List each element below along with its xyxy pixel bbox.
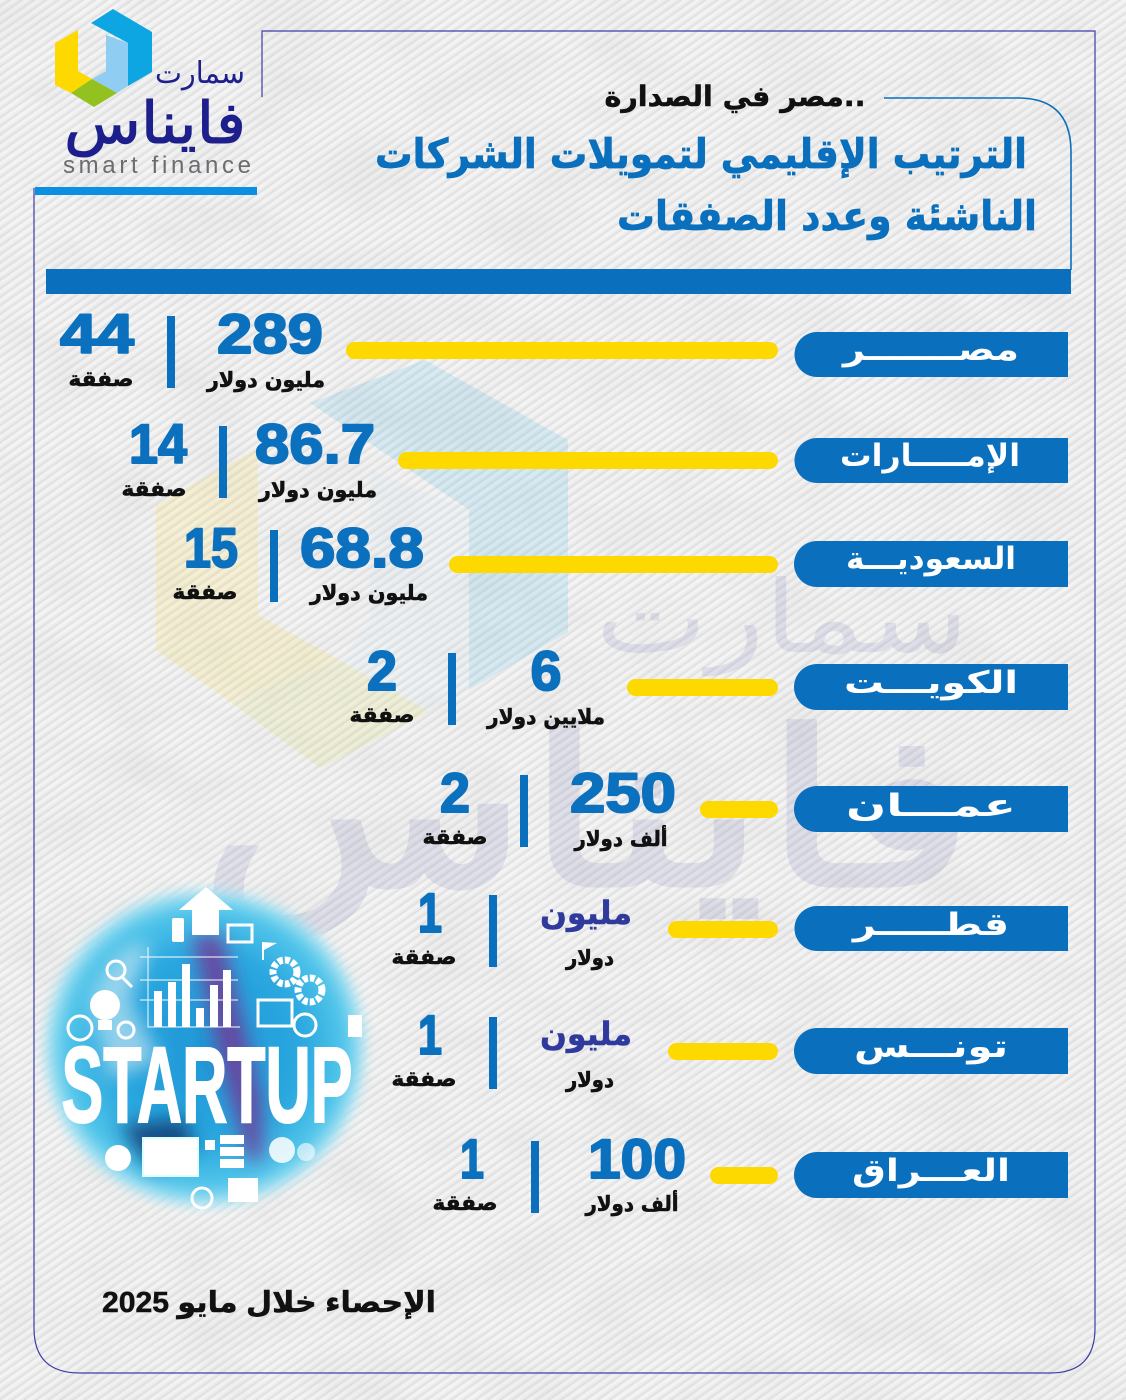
row: Qatar: 1 [418, 881, 442, 944]
row: Oman: ألف دولار [574, 824, 668, 851]
row: Iraq [432, 1127, 1068, 1216]
row: UAE: 86.7 [255, 412, 375, 475]
row: Qatar: قطـــــر [850, 907, 1009, 943]
row: Tunisia: مليون [540, 1015, 632, 1053]
row: Kuwait: الكويـــت [844, 665, 1018, 701]
row: Kuwait: صفقة [350, 703, 414, 727]
row: UAE [122, 412, 1068, 502]
row: Kuwait: 2 [367, 639, 397, 702]
row: Kuwait: ملايين دولار [486, 705, 605, 729]
row: Egypt: صفقة [68, 367, 134, 391]
watermark wordmark [200, 559, 975, 937]
row: Saudi Arabia [172, 516, 1068, 605]
row: Iraq: 1 [460, 1127, 484, 1190]
title frame line [884, 98, 1071, 270]
row: Oman [422, 761, 1068, 851]
logo [55, 9, 251, 179]
row: Egypt: مصـــــــر [841, 332, 1019, 368]
startup bar chart icon [140, 947, 240, 1027]
row: Saudi Arabia: 68.8 [300, 516, 424, 579]
row: Tunisia: 1 [418, 1003, 442, 1066]
row: Iraq: 100 [588, 1127, 686, 1190]
row: Saudi Arabia: صفقة [172, 580, 238, 604]
row: Oman: 250 [570, 761, 676, 824]
row: Tunisia: دولار [565, 1068, 614, 1092]
startup word: STARTUP [62, 1024, 352, 1145]
footer note: الإحصاء خلال مايو 2025 [102, 1287, 436, 1319]
row: Oman: 2 [440, 761, 470, 824]
watermark wordmark: سمارت [596, 559, 968, 676]
watermark logo [156, 360, 568, 768]
logo underline [35, 187, 257, 195]
row: Kuwait: 6 [530, 639, 562, 702]
row: Qatar [392, 881, 1068, 970]
startup image [45, 887, 365, 1208]
row: Oman: صفقة [422, 825, 488, 849]
row: Saudi Arabia: 15 [184, 516, 238, 579]
row: Qatar: دولار [565, 946, 614, 970]
row: Egypt: 289 [217, 302, 323, 365]
startup lower icons [105, 1135, 315, 1208]
row: UAE: الإمـــــارات [840, 438, 1020, 474]
logo: سمارت [155, 56, 245, 91]
watermark wordmark: فايناس [200, 685, 975, 937]
row: Iraq: صفقة [432, 1191, 498, 1215]
logo: فايناس [64, 89, 246, 157]
row: Iraq: ألف دولار [585, 1189, 678, 1216]
header bar [46, 269, 1071, 294]
row: Kuwait [350, 639, 1068, 729]
title line 1: الترتيب الإقليمي لتمويلات الشركات [375, 130, 1027, 178]
row: Tunisia [392, 1003, 1068, 1092]
row: UAE: 14 [129, 412, 187, 475]
row: Saudi Arabia: مليون دولار [309, 581, 428, 605]
logo: smart finance [63, 152, 251, 179]
row: UAE: صفقة [122, 477, 186, 501]
row: Tunisia: تونـــس [854, 1029, 1008, 1065]
row: UAE: مليون دولار [258, 478, 377, 502]
row: Qatar: مليون [540, 894, 632, 932]
row: Qatar: صفقة [392, 945, 456, 969]
row: Egypt: 44 [60, 302, 134, 365]
row: Egypt: مليون دولار [206, 368, 325, 392]
row: Oman: عمـــان [846, 788, 1016, 824]
startup gears icon [273, 960, 322, 1002]
subtitle: مصر في الصدارة.. [604, 80, 866, 113]
startup small icons [68, 918, 362, 1040]
row: Egypt [60, 302, 1068, 392]
row: Tunisia: صفقة [392, 1067, 456, 1091]
row: Iraq: العـــراق [852, 1153, 1010, 1189]
title line 2: الناشئة وعدد الصفقات [617, 192, 1037, 241]
startup arrow icon [179, 887, 233, 935]
startup bulb icon [90, 990, 120, 1030]
row: Saudi Arabia: السعوديـــة [846, 541, 1016, 577]
